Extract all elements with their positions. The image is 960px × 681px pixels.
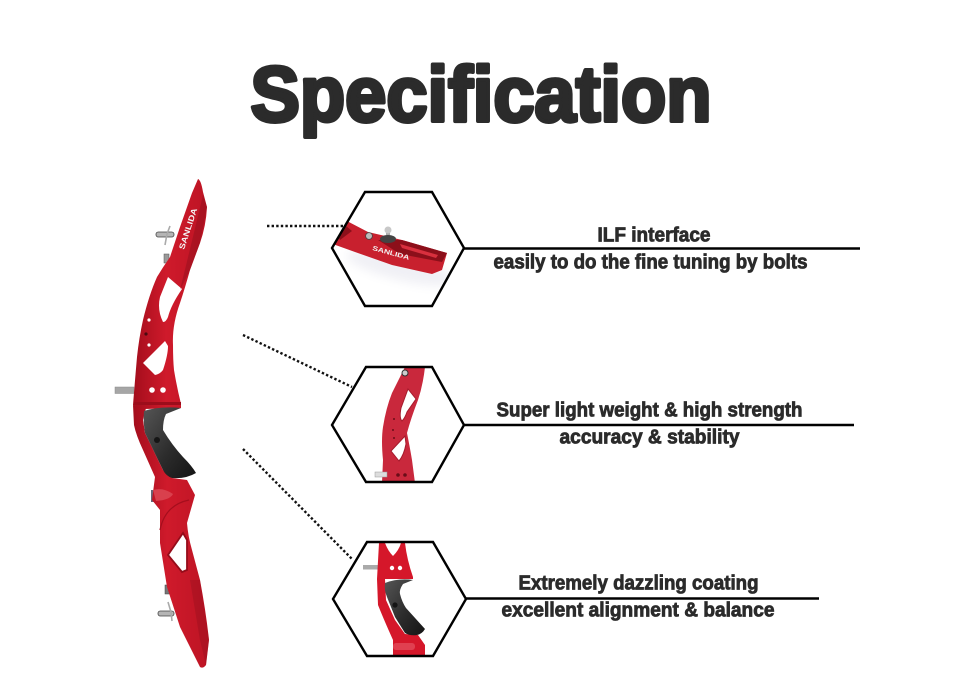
title: Specification (250, 50, 712, 138)
hexagon 2: riser (332, 367, 464, 483)
hexagon 3: grip (333, 542, 466, 660)
riser holes (144, 318, 166, 393)
riser bottom shade (134, 402, 181, 405)
bolt (386, 232, 390, 236)
stabilizer stud (115, 387, 134, 394)
lower limb (133, 405, 209, 668)
brand mark: SANLIDA (177, 207, 199, 251)
connector dotted lines (243, 226, 353, 560)
highlight ridge (153, 489, 173, 501)
limb facets (180, 195, 207, 290)
callout 1 (464, 224, 860, 274)
limb bolts upper (156, 226, 174, 263)
hexagon 1: ILF interface (330, 192, 464, 306)
hexagon 1: ILF interface: SANLIDA (371, 245, 410, 262)
callout 1 heading: ILF interface (598, 224, 710, 246)
riser and upper limb (133, 179, 207, 409)
bow illustration (115, 179, 209, 668)
callout 3 (466, 572, 819, 622)
grip (144, 407, 196, 478)
callout 3 heading: Extremely dazzling coating (518, 572, 758, 594)
callout 2 heading: Super light weight & high strength (496, 400, 802, 422)
callout 1 description: easily to do the fine tuning by bolts (494, 252, 808, 274)
callout 2 (464, 400, 854, 448)
callout 2 description: accuracy & stability (560, 426, 740, 448)
limb bolts lower (151, 490, 174, 621)
limb pocket (330, 220, 447, 274)
lower limb window (168, 533, 187, 572)
callout 3 description: excellent alignment & balance (502, 600, 774, 622)
